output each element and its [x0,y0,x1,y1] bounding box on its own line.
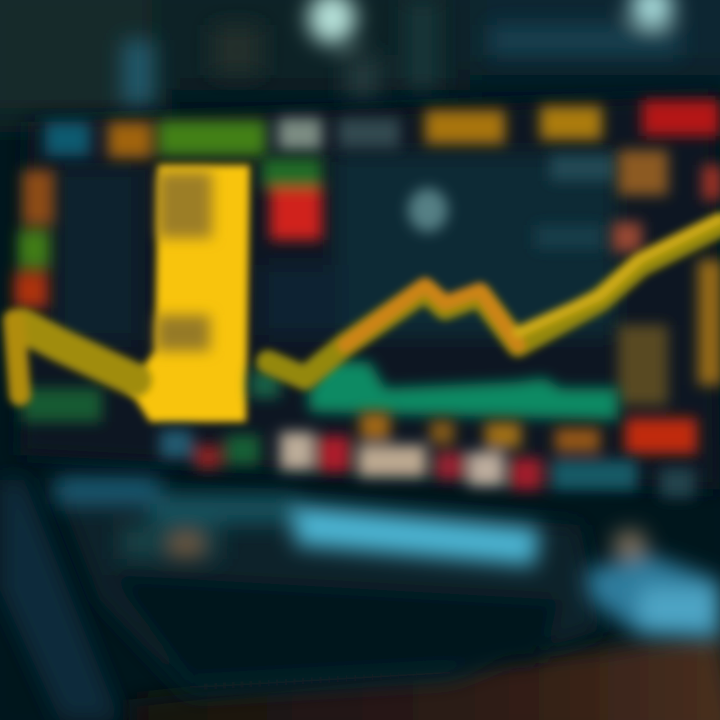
left column indicators [14,170,102,422]
yellow column inner blocks [156,172,212,351]
monitor screen [20,95,720,490]
right edge indicators [612,150,720,454]
right panel text blocks [408,155,615,249]
bottom ticker row [160,412,695,498]
top ticker row [45,100,720,158]
green area band [250,360,618,420]
line chart: yellow trend [14,218,720,395]
dark diagonal stand at left [0,480,120,720]
keyboard glow [55,478,540,566]
background lights [122,0,680,106]
right side glowing object [585,530,720,640]
yellow column [128,165,250,422]
desk surface [130,630,720,720]
red and green tile [262,158,322,240]
keyboard [55,485,600,695]
